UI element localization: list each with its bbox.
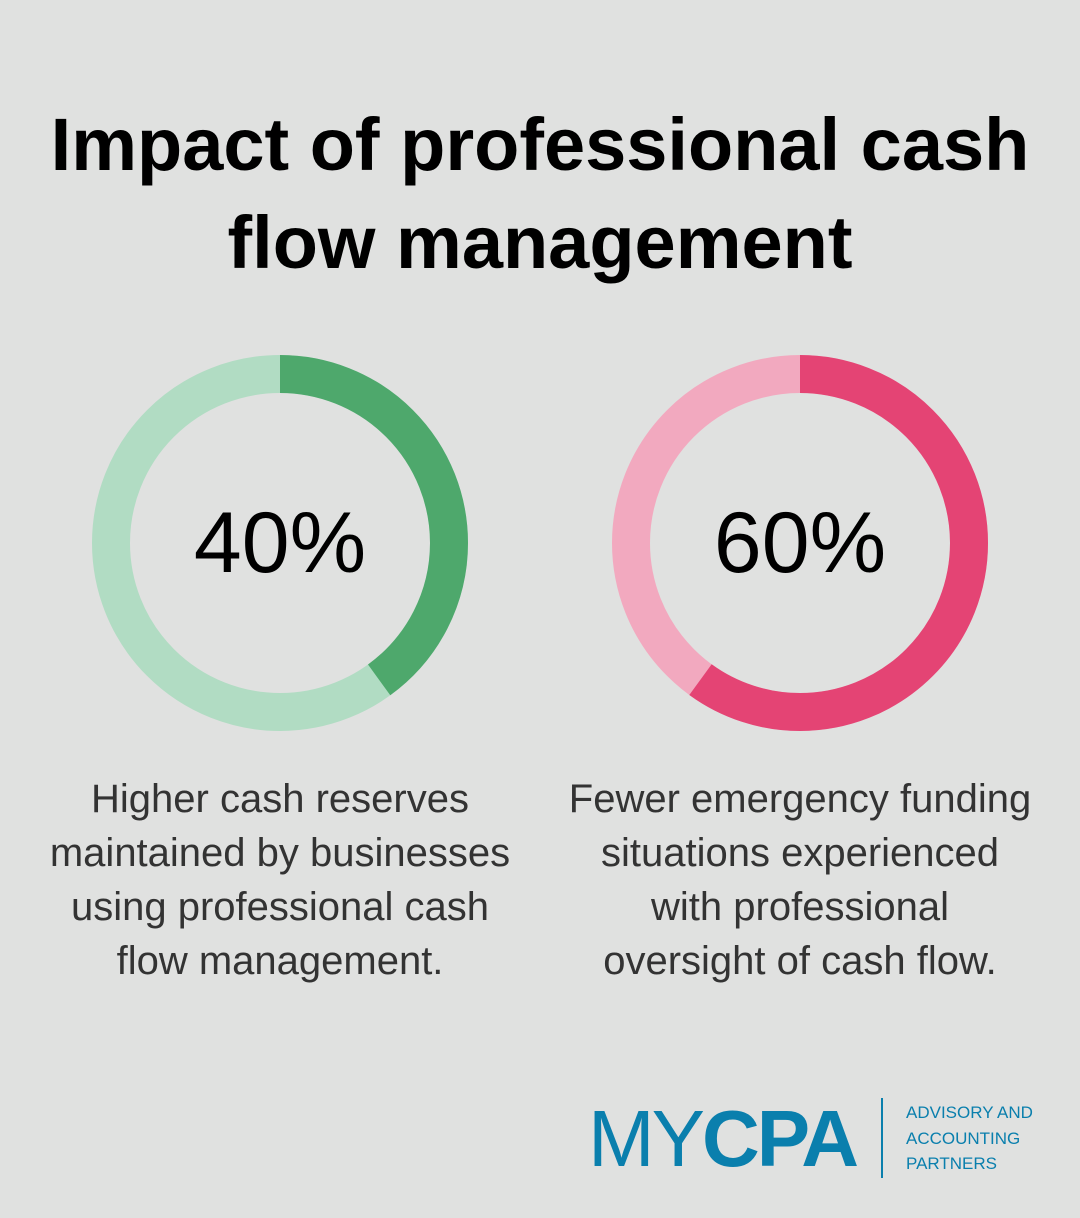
text: left description: flow management.: [117, 939, 443, 983]
title: Impact of professional cash: [51, 103, 1029, 186]
logo: ADVISORY AND: [906, 1103, 1033, 1122]
text: left description: [50, 777, 510, 983]
text: right description: situations experienced: [601, 831, 999, 875]
text: left description: Higher cash reserves: [91, 777, 469, 821]
title: flow management: [228, 201, 852, 284]
title: [51, 103, 1029, 284]
text: left description: maintained by businesses: [50, 831, 510, 875]
text: left description: using professional cash: [71, 885, 489, 929]
donut: 60%: [612, 355, 988, 731]
text: right description: [569, 777, 1031, 983]
donut: 40%: 40%: [194, 495, 366, 591]
logo: MYCPA: [588, 1094, 856, 1183]
logo: ACCOUNTING: [906, 1128, 1020, 1148]
donut: 40%: [92, 355, 468, 731]
text: right description: with professional: [651, 885, 949, 929]
logo: PARTNERS: [906, 1154, 997, 1173]
text: right description: Fewer emergency funding: [569, 777, 1031, 821]
donut: 60%: 60%: [714, 495, 886, 591]
text: right description: oversight of cash flow.: [603, 939, 997, 983]
logo: [588, 1094, 1033, 1183]
